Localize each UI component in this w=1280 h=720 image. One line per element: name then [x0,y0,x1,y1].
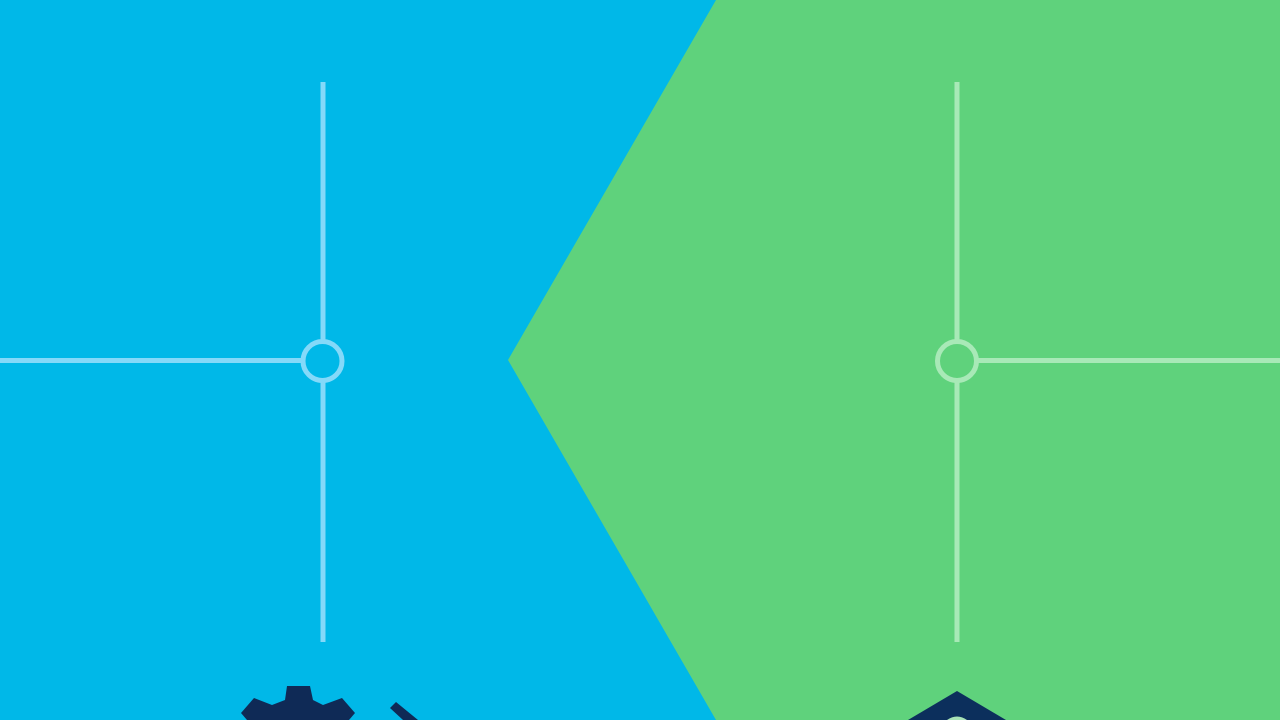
icon: dark hexagon badge [908,691,1006,720]
green timeline connector [938,82,1280,642]
blue timeline connector [0,82,342,642]
icon: gear and wrench [241,686,418,720]
panel: green arrow-shaped background [508,0,1280,720]
